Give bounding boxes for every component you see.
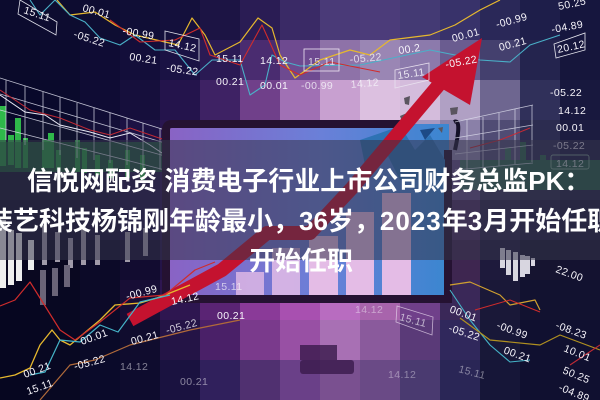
chart value labels: 00.01 bbox=[448, 304, 479, 324]
chart value labels: 10.01 bbox=[562, 343, 593, 364]
chart value labels: 15.11 bbox=[397, 66, 426, 82]
right grid and green bars bbox=[455, 105, 600, 281]
chart value labels: -05.22 bbox=[73, 353, 107, 373]
lower purple blocks bbox=[300, 345, 354, 374]
chart value labels: 00.01 bbox=[79, 327, 110, 348]
top line charts bbox=[30, 0, 560, 95]
title text: 信悦网配资 消费电子行业上市公司财务总监PK： bbox=[27, 166, 590, 196]
monitor frame bbox=[166, 124, 449, 299]
chart value labels: 00.21 bbox=[216, 76, 244, 88]
chart value labels: 00.21 bbox=[502, 345, 533, 365]
chart value labels: 14.12 bbox=[260, 55, 288, 67]
chart value labels: 14.12 bbox=[355, 304, 383, 316]
chart value labels: 14.12 bbox=[556, 158, 584, 170]
chart value labels: 00.21 bbox=[217, 310, 245, 322]
chart value labels: 15.11 bbox=[216, 53, 244, 65]
chart value labels: 00.01 bbox=[451, 26, 481, 45]
chart value labels: 00.21 bbox=[129, 51, 158, 67]
chart value labels: 15.11 bbox=[457, 363, 487, 382]
chart value labels: 15.11 bbox=[398, 311, 428, 330]
chart value labels: -00.99 bbox=[495, 11, 529, 31]
chart value labels: -05.22 bbox=[349, 51, 382, 66]
lower line charts bbox=[0, 262, 600, 400]
chart value labels: 14.12 bbox=[120, 361, 148, 373]
chart value labels: -00.99 bbox=[125, 283, 159, 303]
monitor screen bbox=[166, 124, 449, 299]
chart value labels: 22.00 bbox=[554, 264, 585, 284]
chart value labels: 15.11 bbox=[308, 56, 336, 68]
chart value labels: -05.22 bbox=[72, 28, 106, 50]
chart value labels: -04.89 bbox=[550, 19, 584, 36]
chart value labels: 00.21 bbox=[498, 35, 528, 54]
chart value labels: 14.12 bbox=[167, 37, 198, 55]
chart value labels: 15.11 bbox=[25, 377, 55, 398]
chart value labels: 15.11 bbox=[215, 281, 242, 293]
chart value labels: -05.22 bbox=[166, 62, 199, 78]
chart value labels: 00.01 bbox=[260, 80, 288, 92]
chart value labels: 14.12 bbox=[350, 77, 379, 91]
chart value labels: 15.11 bbox=[22, 4, 52, 24]
chart value labels: -05.22 bbox=[550, 87, 582, 99]
chart value labels: 00.2 bbox=[398, 42, 421, 57]
chart value labels: -05.22 bbox=[553, 140, 585, 152]
chart value labels: -00.99 bbox=[301, 80, 333, 92]
title text: 开始任职 bbox=[249, 246, 353, 276]
chart value labels: -00.99 bbox=[495, 320, 529, 342]
left lower candle bars bbox=[0, 220, 148, 305]
chart value labels: 50.25 bbox=[561, 365, 592, 386]
chart value labels: 20.12 bbox=[556, 38, 586, 56]
chart value labels: -05.22 bbox=[165, 317, 199, 337]
chart value labels: 00.21 bbox=[180, 376, 208, 388]
red arrow bbox=[130, 38, 482, 320]
chart value labels: 14.12 bbox=[170, 290, 200, 308]
chart value labels: 00.21 bbox=[130, 329, 160, 348]
chart value labels: -08.23 bbox=[554, 320, 588, 342]
chart value labels: 00.01 bbox=[556, 122, 584, 134]
chart value labels: 00.01 bbox=[81, 2, 112, 21]
chart value labels: 14.12 bbox=[388, 369, 416, 381]
monitor bars bbox=[236, 193, 411, 295]
title text bbox=[0, 166, 600, 276]
dark title band bbox=[0, 140, 600, 260]
chart value labels: -05.22 bbox=[444, 54, 478, 71]
chart value labels: 14.12 bbox=[558, 105, 586, 117]
left chart: grid with green bars bbox=[0, 78, 165, 180]
broken screen shards bbox=[360, 96, 458, 180]
chart value labels: -00.99 bbox=[121, 25, 155, 43]
chart value labels: 00 21 bbox=[22, 360, 53, 381]
chart value labels: -05.22 bbox=[447, 322, 481, 344]
